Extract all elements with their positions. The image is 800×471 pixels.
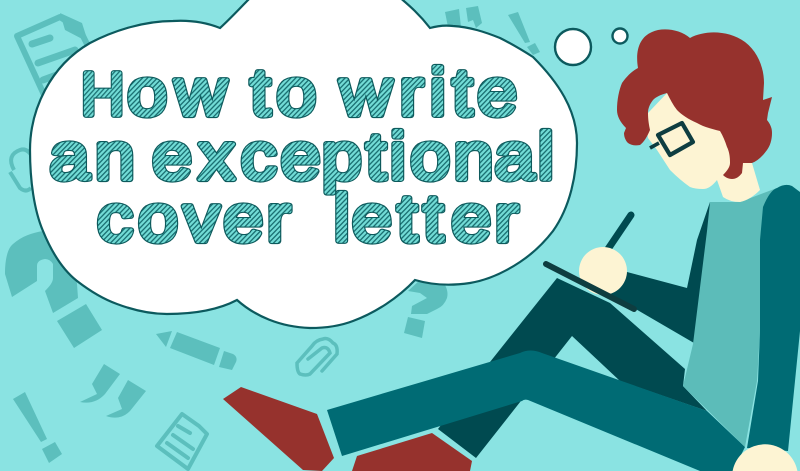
thought bubble large [555, 29, 591, 65]
tablet [546, 264, 634, 309]
hand on knee [733, 444, 797, 471]
background icons [5, 6, 540, 469]
title: H [81, 61, 124, 128]
icon: top quote marks [445, 6, 482, 28]
front leg [327, 350, 745, 471]
shoe right [352, 433, 472, 471]
icon: pencil [156, 331, 237, 370]
title: coverletter [97, 181, 518, 255]
icon: closing quote marks [80, 364, 146, 418]
title: anexceptional [50, 119, 554, 193]
shoe left [223, 387, 334, 471]
thought bubble small [612, 28, 628, 44]
back leg [438, 278, 707, 458]
icon: exclamation mark top [508, 12, 540, 55]
hand holding pen [579, 247, 627, 295]
icon: document top left [17, 13, 110, 97]
pen [606, 215, 631, 252]
title: owtowrite [127, 55, 517, 129]
title: anexceptional [50, 119, 554, 193]
icon: paperclip bottom [297, 338, 337, 375]
icon: large question mark [5, 231, 102, 348]
title: coverletter [97, 181, 518, 255]
title: owtowrite [127, 55, 517, 129]
sleeve [747, 185, 800, 451]
torso [683, 188, 790, 447]
title [50, 55, 554, 255]
far arm [600, 202, 712, 343]
hair [617, 29, 772, 179]
glasses [650, 123, 693, 155]
person illustration [223, 29, 800, 471]
icon: paperclip left [10, 149, 34, 190]
neck and face [647, 93, 760, 202]
thought cloud [30, 0, 577, 328]
title: H [81, 61, 124, 128]
icon: exclamation mark bottom left [13, 392, 62, 463]
icon: document bottom [157, 414, 207, 469]
icon: small question mark [404, 280, 448, 338]
